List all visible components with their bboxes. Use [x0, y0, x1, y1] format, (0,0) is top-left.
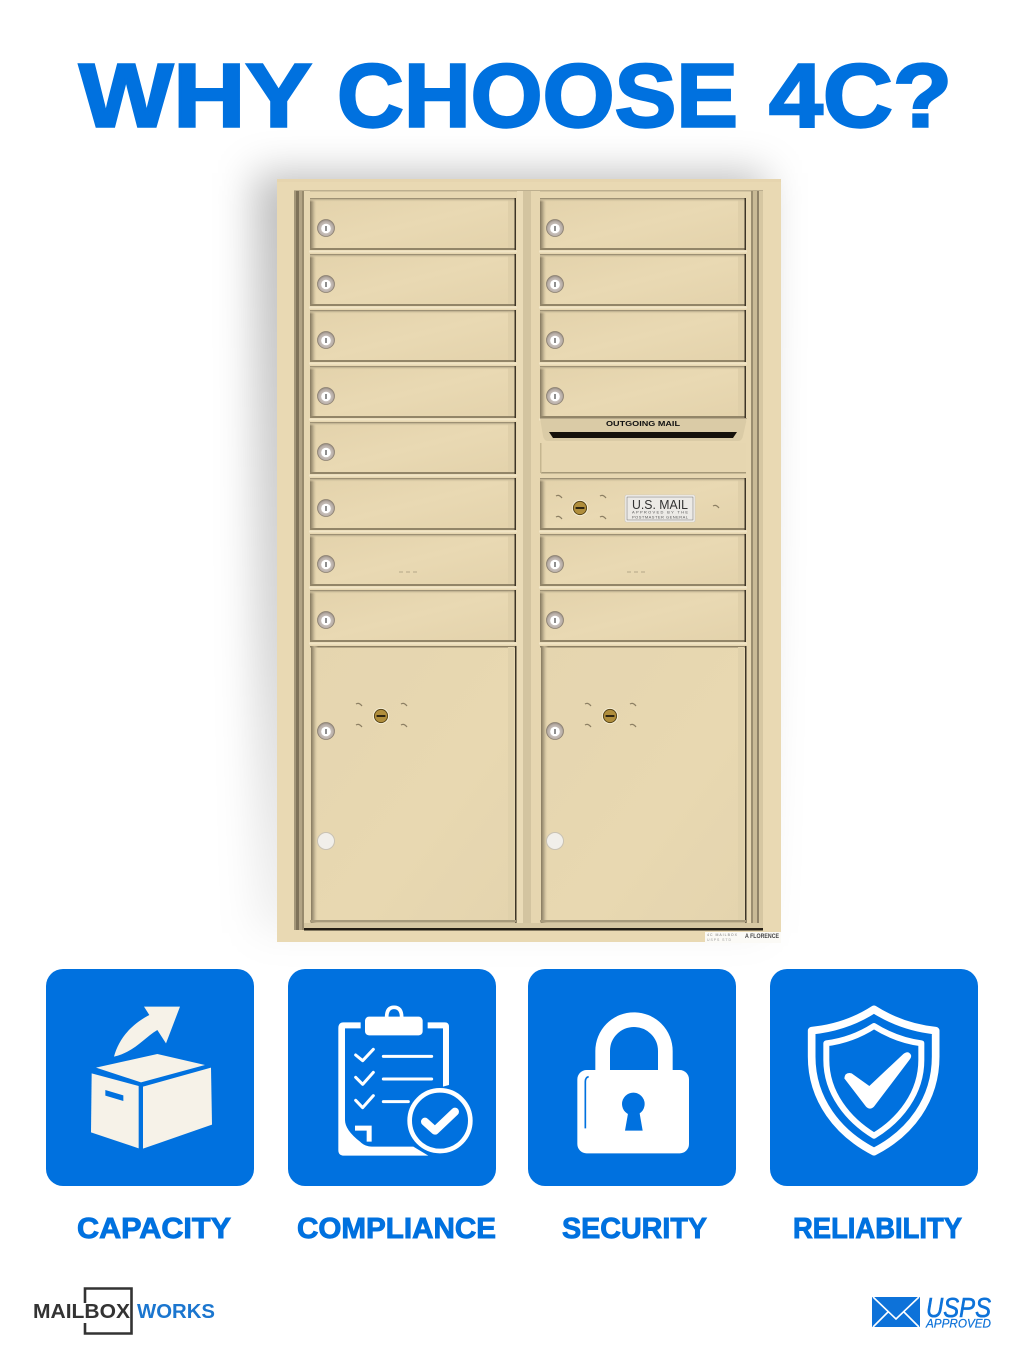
- manufacturer label: 4C MAILBOX: [707, 933, 738, 937]
- label: reliability: RELIABILITY: [793, 1213, 962, 1245]
- U.S. Mail plate: U.S. MAIL: [632, 498, 688, 512]
- title: [79, 46, 952, 146]
- logo: Mailbox Works: WORKS: [137, 1301, 215, 1323]
- right column compartment doors: [539, 198, 747, 644]
- manufacturer label: [705, 932, 781, 943]
- left column compartment doors: [309, 198, 517, 644]
- panel: reliability icon: [770, 969, 978, 1186]
- outgoing mail slot: [540, 418, 747, 474]
- label: compliance: COMPLIANCE: [297, 1213, 496, 1245]
- logo: USPS Approved: [872, 1292, 991, 1330]
- mailbox cabinet: [277, 179, 781, 943]
- label: capacity: CAPACITY: [77, 1213, 231, 1245]
- logo: USPS Approved: USPS: [926, 1292, 991, 1323]
- icon: clipboard with check: [338, 1007, 470, 1156]
- panel: compliance icon: [288, 969, 496, 1186]
- manufacturer label: USPS STD: [707, 938, 731, 942]
- left parcel locker: [310, 646, 516, 923]
- panel: security icon: [528, 969, 736, 1186]
- right parcel locker: [540, 646, 746, 923]
- master door with U.S. Mail plate: [539, 478, 747, 532]
- icon: padlock: [577, 1020, 689, 1153]
- title: CHOOSE: [337, 46, 738, 146]
- icon: shield with check: [812, 1009, 936, 1152]
- outer frame: [277, 179, 781, 942]
- title: WHY: [79, 46, 312, 146]
- U.S. Mail plate: POSTMASTER GENERAL: [632, 514, 689, 520]
- icon: box with arrow: [91, 1007, 212, 1149]
- logo: USPS Approved: APPROVED: [925, 1316, 991, 1330]
- title: 4C?: [769, 46, 952, 146]
- panel: capacity icon: [46, 969, 254, 1186]
- icon: envelope: [872, 1297, 920, 1327]
- logo: Mailbox Works: [33, 1288, 215, 1334]
- manufacturer label: A FLORENCE: [745, 934, 779, 940]
- logo: Mailbox Works: MAILBOX: [33, 1301, 131, 1323]
- label: security: SECURITY: [562, 1213, 707, 1245]
- U.S. Mail plate: [625, 495, 695, 522]
- outgoing mail slot: OUTGOING MAIL: [606, 421, 681, 428]
- cabinet drop shadow: [255, 173, 765, 933]
- U.S. Mail plate: APPROVED BY THE: [632, 510, 688, 514]
